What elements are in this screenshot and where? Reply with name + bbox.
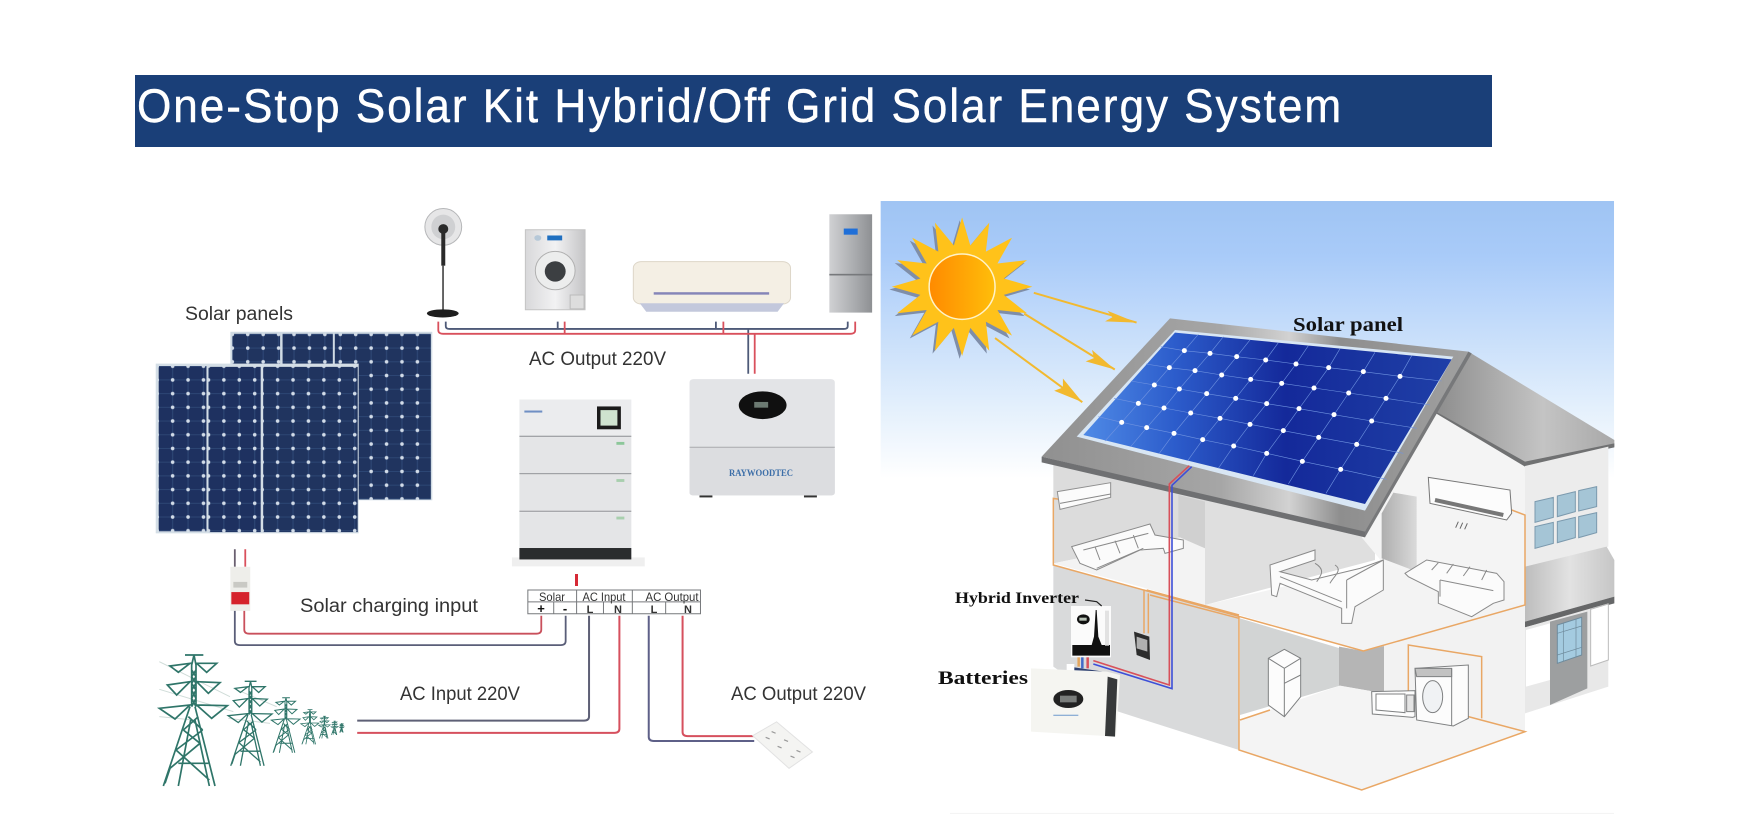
- label: batteries: Batteries: [938, 668, 1028, 689]
- wires: solar charging: [235, 611, 566, 645]
- icon: energy meter: [1134, 632, 1150, 660]
- panel: off-grid wiring diagram: [156, 209, 872, 786]
- arrows: sun rays: [995, 293, 1137, 402]
- terminal block: AC Output: [646, 590, 699, 604]
- upper wall: [1525, 447, 1608, 567]
- icon: hybrid inverter: [690, 379, 835, 497]
- terminal block: [528, 590, 700, 616]
- icon: wall air conditioners: [1057, 477, 1512, 529]
- lower wall: [1525, 603, 1608, 713]
- icon: hybrid inverter unit: [1071, 600, 1111, 668]
- title: [135, 75, 1492, 147]
- gable inner wall: [1362, 413, 1525, 605]
- lower left exterior wall: [1053, 565, 1239, 750]
- label: inverter brand: RAYWOODTEC: [729, 468, 793, 478]
- icon: refrigerator: [829, 214, 872, 313]
- icon: washing machine: [525, 230, 585, 310]
- terminal block: N: [684, 604, 692, 616]
- icon: pedestal fan: [425, 209, 462, 317]
- title: One-Stop Solar Kit Hybrid/Off Grid Solar Energy System: [137, 80, 1341, 132]
- icon: battery stack: [512, 400, 645, 566]
- sky background: [881, 201, 1614, 813]
- wires: AC output bus: [438, 322, 855, 374]
- icon: DC breaker: [230, 549, 250, 611]
- wire: battery link: [575, 574, 578, 586]
- label: AC input 220V: AC Input 220V: [400, 684, 520, 705]
- wires: AC input: [357, 616, 619, 733]
- solar array on roof: [1077, 330, 1453, 511]
- terminal block: +: [537, 601, 545, 616]
- label: AC output 220V top: AC Output 220V: [529, 349, 666, 370]
- label: solar charging input: Solar charging input: [300, 596, 479, 617]
- right gable roof: [1436, 352, 1614, 466]
- icon: power transmission towers: [159, 655, 344, 786]
- terminal block: AC Input: [582, 590, 626, 604]
- terminal block: L: [587, 604, 594, 616]
- terminal block: -: [563, 601, 567, 616]
- lower room: [1240, 618, 1340, 715]
- house: interior cutaway: [1042, 318, 1525, 790]
- icon: solar panels: [156, 332, 432, 533]
- upper floors: [1053, 537, 1205, 605]
- heading: solar panels: Solar panels: [185, 304, 293, 325]
- icon: kitchen and laundry appliances: [1268, 649, 1468, 726]
- label: AC output 220V bottom: AC Output 220V: [731, 684, 866, 705]
- terminal block: Solar: [539, 590, 565, 604]
- label: solar panel: Solar panel: [1293, 314, 1404, 336]
- terminal block: N: [614, 604, 622, 616]
- awning: [1525, 547, 1614, 622]
- icon: power socket: [753, 722, 812, 768]
- door: [1550, 612, 1587, 705]
- windows: [1535, 487, 1597, 548]
- icon: sun: [889, 217, 1032, 359]
- icon: furniture right sofa: [1405, 560, 1504, 617]
- wires: AC output to socket: [649, 616, 754, 741]
- orange conduit: [1053, 498, 1525, 790]
- house: right wing exterior: [1435, 352, 1614, 713]
- panel: house solar illustration: [881, 201, 1614, 813]
- icon: battery unit: [1031, 664, 1120, 737]
- terminal block: L: [651, 604, 658, 616]
- upper left wall: [1053, 463, 1205, 563]
- label: hybrid inverter: Hybrid Inverter: [955, 590, 1079, 607]
- icon: furniture: [1072, 524, 1383, 623]
- wire: panel to inverter: [1093, 466, 1192, 689]
- mid wall: [1205, 500, 1375, 605]
- main roof: [1042, 318, 1468, 533]
- icon: air conditioner: [633, 262, 791, 312]
